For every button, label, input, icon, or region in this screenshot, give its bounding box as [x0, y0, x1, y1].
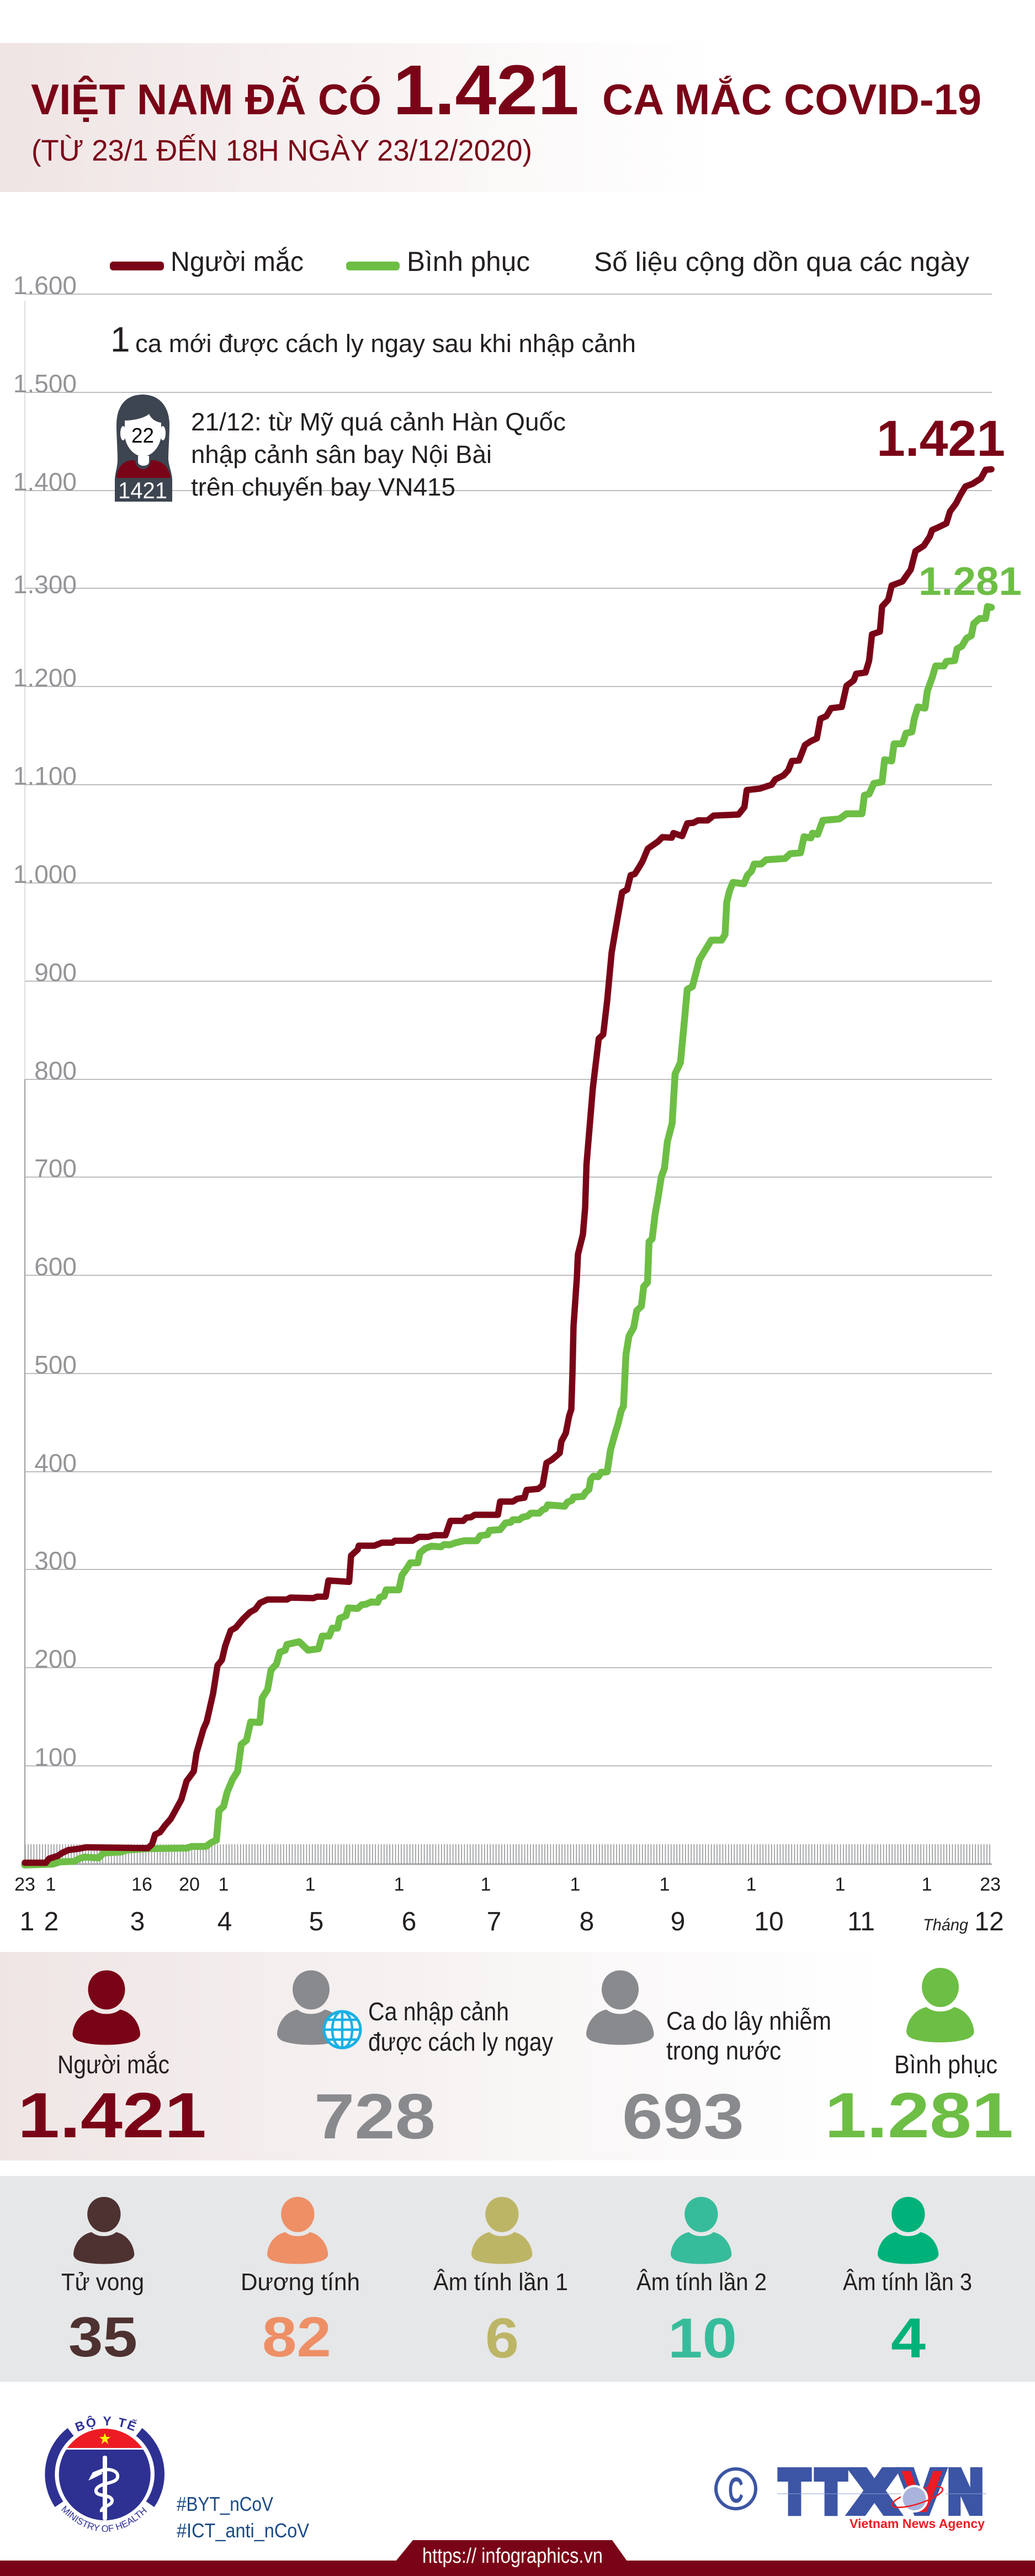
- stat: recovered: [825, 1968, 1013, 2151]
- confirmed cases line: [25, 469, 991, 1863]
- x axis day labels: 1: [570, 1874, 580, 1895]
- x axis month labels: 6: [402, 1907, 416, 1936]
- x axis month labels: 8: [580, 1907, 594, 1936]
- stat: deaths: 35: [68, 2306, 137, 2369]
- stat: negative once: [433, 2197, 568, 2370]
- x axis day labels: 23: [980, 1874, 1001, 1895]
- new case heading: ca mới được cách ly ngay sau khi nhập cảnh: [135, 329, 636, 358]
- logo: TTXVN: V: [901, 2458, 943, 2525]
- logo: copyright: C: [728, 2469, 744, 2510]
- x axis month labels: 7: [487, 1907, 501, 1936]
- logo: TTXVN: Vietnam News Agency: [850, 2516, 985, 2531]
- y axis labels: 1.500: [13, 369, 77, 398]
- total recovered value: 1.281: [919, 560, 1022, 604]
- x axis day labels: 1: [305, 1874, 315, 1895]
- y axis labels: 400: [34, 1449, 77, 1477]
- stat: negative three times: [843, 2197, 972, 2370]
- x axis month labels: 5: [309, 1907, 323, 1936]
- icon: patient 1421: [115, 395, 172, 503]
- y axis labels: 100: [34, 1743, 77, 1771]
- stat: domestic cases: [586, 1970, 831, 2152]
- total confirmed value: 1.421: [877, 411, 1005, 467]
- logo: TTXVN: X: [852, 2458, 896, 2525]
- x axis month labels: 10: [754, 1907, 784, 1936]
- legend: recovered: Bình phục: [407, 246, 530, 277]
- y axis labels: [13, 271, 77, 1771]
- stat: positive: 82: [262, 2306, 331, 2369]
- case description: 21/12: từ Mỹ quá cảnh Hàn Quốc: [191, 408, 566, 436]
- stat: negative once: Âm tính lần 1: [433, 2269, 568, 2296]
- stat: positive: [241, 2197, 360, 2369]
- hashtags: #ICT_anti_nCoV: [177, 2519, 309, 2542]
- hashtags: #BYT_nCoV: [177, 2493, 273, 2515]
- x axis day labels: 23: [14, 1874, 35, 1895]
- footer bar: https:// infographics.vn: [422, 2545, 603, 2568]
- title: CA MẮC COVID-19: [602, 75, 981, 124]
- stat: imported cases: 728: [314, 2080, 436, 2152]
- x axis day labels: 1: [481, 1874, 491, 1895]
- stat: negative twice: [636, 2197, 767, 2370]
- x axis month labels: 12: [974, 1907, 1004, 1936]
- case description: nhập cảnh sân bay Nội Bài: [191, 440, 492, 469]
- logo: ministry of health: MINISTRY OF HEALTH: [61, 2505, 147, 2532]
- stat: negative three times: Âm tính lần 3: [843, 2269, 972, 2296]
- hashtags: [177, 2493, 309, 2542]
- x axis day labels: 1: [922, 1874, 932, 1895]
- logo: copyright: [716, 2469, 756, 2510]
- x axis day labels: 1: [394, 1874, 404, 1895]
- month axis caption: Tháng: [923, 1916, 968, 1934]
- logo: TTXVN: [777, 2458, 986, 2531]
- y axis labels: 600: [34, 1252, 77, 1281]
- new case heading: [110, 320, 636, 359]
- y axis labels: 200: [34, 1644, 77, 1673]
- icon: globe: [324, 2011, 360, 2048]
- stat: negative once: 6: [485, 2307, 519, 2370]
- stat: imported cases: [277, 1970, 553, 2152]
- x axis month labels: [20, 1907, 1004, 1936]
- stat: positive: Dương tính: [241, 2269, 360, 2296]
- icon: patient 1421: 22: [131, 424, 154, 448]
- legend: recovered: [346, 246, 530, 277]
- panel: outcome statistics: [0, 2176, 1035, 2382]
- x axis month labels: 11: [847, 1907, 875, 1936]
- y axis labels: 1.200: [13, 663, 77, 692]
- x axis day labels: 1: [835, 1874, 845, 1895]
- stat: negative twice: Âm tính lần 2: [636, 2269, 767, 2296]
- logo: TTXVN: V: [901, 2458, 943, 2525]
- header band: [0, 43, 981, 192]
- stat: negative twice: 10: [668, 2307, 737, 2370]
- line chart: [13, 271, 1022, 1936]
- stat: domestic cases: trong nước: [666, 2036, 781, 2065]
- x axis month labels: 9: [671, 1907, 685, 1936]
- y axis labels: 700: [34, 1154, 77, 1183]
- y axis labels: 1.400: [13, 467, 77, 496]
- title: 1.421: [393, 51, 579, 130]
- y axis labels: 1.100: [13, 762, 77, 790]
- y axis labels: 900: [34, 958, 77, 987]
- stat: imported cases: Ca nhập cảnh: [368, 1997, 509, 2026]
- stat: deaths: Tử vong: [61, 2269, 144, 2296]
- stat: recovered: 1.281: [825, 2079, 1013, 2151]
- y axis labels: 500: [34, 1350, 77, 1379]
- x axis day labels: 20: [179, 1874, 200, 1895]
- stat: domestic cases: Ca do lây nhiễm: [666, 2006, 831, 2035]
- stat: confirmed: [18, 1970, 206, 2151]
- title: VIỆT NAM ĐÃ CÓ: [31, 75, 381, 124]
- x axis day labels: 1: [219, 1874, 229, 1895]
- grid lines: [25, 294, 992, 1864]
- title: [31, 51, 981, 130]
- legend note: Số liệu cộng dồn qua các ngày: [594, 248, 969, 277]
- recovered line: [25, 606, 991, 1865]
- stat: confirmed: 1.421: [18, 2079, 206, 2151]
- x axis month labels: 3: [130, 1907, 145, 1936]
- logo: TTXVN: T: [780, 2458, 809, 2525]
- case description: [191, 408, 566, 501]
- legend: confirmed: [110, 246, 304, 277]
- x axis month labels: 4: [217, 1907, 232, 1936]
- x axis day labels: 1: [660, 1874, 670, 1895]
- icon: patient 1421: 1421: [118, 477, 167, 503]
- stat: imported cases: được cách ly ngay: [368, 2027, 553, 2056]
- stat: negative three times: 4: [891, 2307, 926, 2370]
- logo: TTXVN: T: [816, 2458, 846, 2525]
- x axis day labels: [14, 1874, 1001, 1895]
- x axis month labels: 1: [20, 1907, 34, 1936]
- x axis day labels: 1: [46, 1874, 56, 1895]
- stat: recovered: Bình phục: [894, 2050, 997, 2079]
- y axis labels: 1.000: [13, 860, 77, 888]
- stat: confirmed: Người mắc: [57, 2050, 169, 2079]
- logo: ministry of health: [45, 2416, 164, 2532]
- panel: main statistics: [0, 1952, 1013, 2160]
- logo: TTXVN: N: [948, 2458, 983, 2525]
- stat: deaths: [61, 2197, 144, 2369]
- legend: confirmed: Người mắc: [171, 246, 304, 277]
- y axis labels: 300: [34, 1546, 77, 1575]
- x axis day labels: 1: [746, 1874, 756, 1895]
- legend: [110, 246, 969, 277]
- y axis labels: 800: [34, 1056, 77, 1085]
- stat: domestic cases: 693: [622, 2080, 744, 2152]
- x axis month labels: 2: [44, 1907, 59, 1936]
- y axis labels: 1.600: [13, 271, 77, 300]
- footer bar: [0, 2540, 1035, 2576]
- new case heading: 1: [110, 320, 130, 359]
- logo: ministry of health: BỘ Y TẾ: [75, 2416, 137, 2431]
- subtitle: (TỪ 23/1 ĐẾN 18H NGÀY 23/12/2020): [31, 134, 532, 167]
- case description: trên chuyến bay VN415: [191, 473, 455, 501]
- x axis day labels: 16: [131, 1874, 152, 1895]
- y axis labels: 1.300: [13, 570, 77, 599]
